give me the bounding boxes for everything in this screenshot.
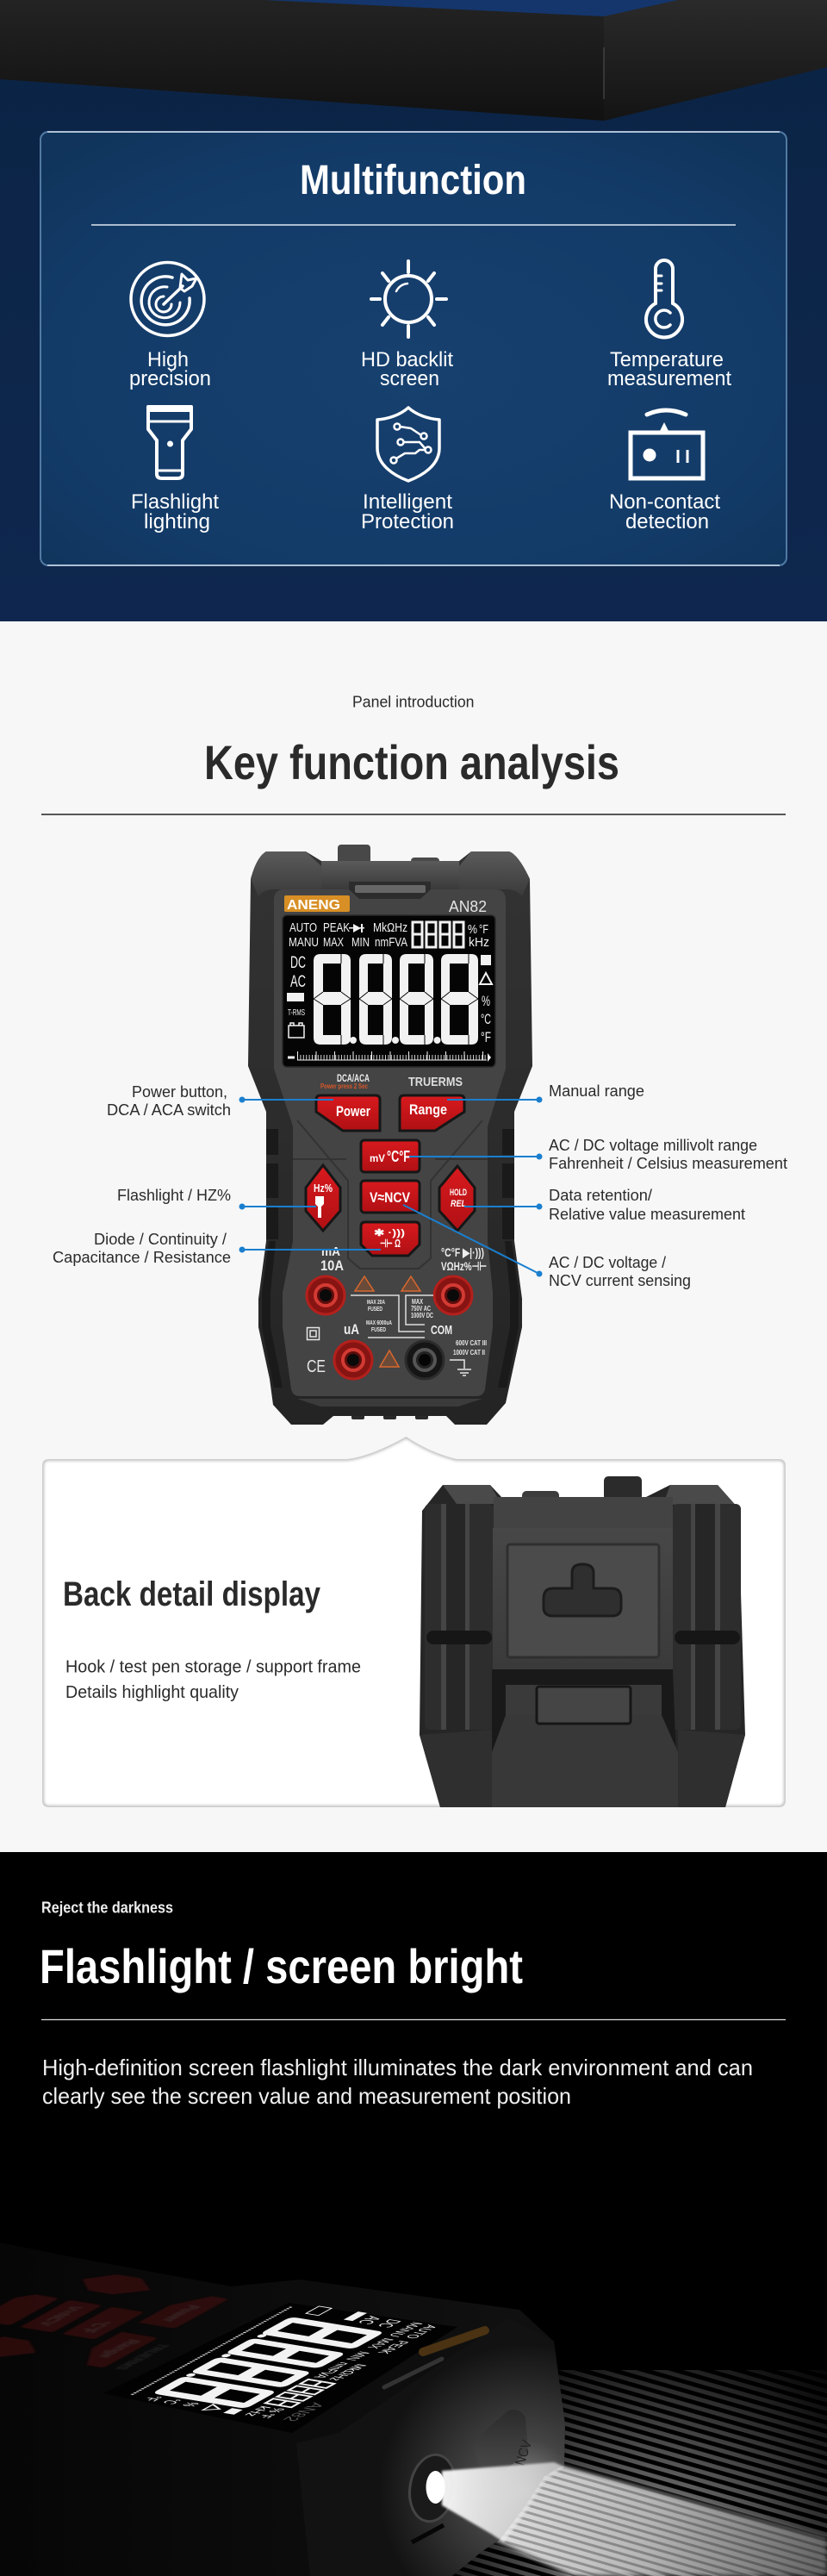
LCD indicators: MAX — [323, 935, 344, 950]
screen contents: PEAK — [374, 2340, 412, 2355]
jack: V — [434, 1276, 472, 1314]
ratings text: MAX 20A — [367, 1300, 385, 1306]
dim keypad — [0, 2267, 259, 2376]
section: flashlight and screen — [0, 1852, 827, 2576]
bar scale — [288, 1056, 487, 1060]
button: V NCV: V≈NCV — [370, 1189, 411, 1206]
lens bezel — [405, 2451, 460, 2525]
heading: Back detail display: Back detail display — [63, 1575, 321, 1613]
screen contents: MIN — [342, 2350, 372, 2361]
section: multifunction background — [0, 0, 827, 621]
icon: thermometer — [646, 260, 682, 337]
LCD indicators: % — [468, 922, 477, 937]
button: HOLD REL: HOLD — [450, 1188, 467, 1198]
icon: sun — [371, 261, 446, 337]
LCD screen: DC — [290, 954, 306, 972]
LCD indicators: nmFVA — [375, 935, 407, 950]
label: High precision — [129, 348, 211, 390]
paragraph — [42, 2055, 753, 2109]
LCD indicators: °F — [479, 922, 488, 937]
left column — [425, 1504, 494, 1730]
label: Temperature measurement: Temperature — [610, 348, 724, 371]
print above buttons: TRUERMS — [408, 1075, 463, 1089]
LCD screen: % — [482, 993, 490, 1009]
text: details — [65, 1658, 361, 1702]
compliance marks — [307, 1327, 471, 1375]
leader: diode — [239, 1246, 381, 1253]
ratings text: MAX 6000uA — [366, 1320, 392, 1326]
logo: ANENG — [284, 895, 350, 913]
dim keypad: °C°F — [77, 2320, 115, 2334]
screen contents: % — [264, 2407, 288, 2414]
screen contents — [127, 2302, 465, 2424]
leader: ncv — [403, 1205, 543, 1277]
button: Range: Range — [409, 1101, 447, 1118]
section: key function analysis — [0, 621, 827, 1852]
paragraph: clearly see the screen value and measurement position — [42, 2083, 571, 2109]
lower body — [492, 1669, 678, 1807]
LCD indicators: MkΩHz — [373, 920, 407, 935]
keypad frame lines — [293, 1120, 488, 1269]
label: Temperature measurement: measurement — [607, 367, 731, 390]
LCD screen — [283, 915, 495, 1067]
button: V NCV — [361, 1181, 420, 1213]
product: meter in the dark — [0, 2242, 565, 2576]
label: diode continuity — [53, 1231, 231, 1266]
label: voltage ncv — [549, 1254, 691, 1289]
button: HOLD REL: REL — [451, 1199, 466, 1209]
side lower shade — [420, 1730, 745, 1807]
screen contents: kHz — [241, 2405, 273, 2417]
label: voltage ncv: AC / DC voltage / — [549, 1254, 666, 1271]
right indicators — [481, 955, 491, 965]
label: millivolt and temperature: Fahrenheit / Celsius measurement — [549, 1155, 787, 1172]
LCD indicators: MIN — [351, 935, 370, 950]
product: multimeter front view — [248, 845, 532, 1425]
label: manual range: Manual range — [549, 1082, 644, 1100]
label: Flashlight lighting: lighting — [144, 510, 210, 533]
label: Flashlight lighting — [131, 490, 219, 533]
stand tab — [537, 1687, 631, 1724]
button: diode continuity: ✱ ·))) — [374, 1228, 405, 1238]
print above buttons — [320, 1072, 463, 1090]
jack labels: VΩHz%⊣⊢ — [441, 1259, 487, 1273]
button: Range — [400, 1095, 464, 1131]
knob and top details — [338, 845, 439, 866]
label: HD backlit screen: screen — [380, 367, 439, 390]
label: flashlight Hz: Flashlight / HZ% — [117, 1187, 231, 1204]
label: Intelligent Protection: Protection — [361, 510, 454, 533]
jack labels — [320, 1244, 487, 1338]
button: HOLD REL — [439, 1166, 475, 1231]
screen contents: AUTO — [401, 2324, 440, 2339]
label: power button: Power button, — [132, 1083, 227, 1101]
label: HD backlit screen: HD backlit — [361, 348, 453, 371]
label: millivolt and temperature — [549, 1137, 787, 1172]
label: High precision: precision — [129, 367, 211, 390]
paragraph: High-definition screen flashlight illuminates the dark environment and can — [42, 2055, 753, 2080]
shoulders — [251, 851, 530, 896]
feet — [351, 1413, 428, 1419]
warning triangles — [355, 1276, 420, 1367]
LCD indicators: AUTO — [289, 920, 317, 935]
screen contents: MkΩHz — [326, 2363, 370, 2381]
leader: range — [447, 1096, 543, 1103]
ratings text: MAX — [412, 1298, 423, 1306]
big digits — [314, 954, 351, 1045]
leader: millivolt — [409, 1153, 543, 1160]
button: Power: Power — [336, 1103, 370, 1120]
print above buttons: Power press 2 Sec — [320, 1082, 368, 1090]
icon: non-contact detector — [631, 410, 703, 478]
flashlight slot — [412, 2525, 444, 2542]
label: data retention: Relative value measurement — [549, 1206, 745, 1223]
LCD screen: T-RMS — [288, 1008, 305, 1018]
side grips — [262, 1129, 519, 1388]
dim keypad: Power — [158, 2304, 205, 2323]
label: diode continuity: Diode / Continuity / — [94, 1231, 227, 1248]
jack labels: 10A — [320, 1257, 344, 1274]
screen contents: °C — [159, 2398, 185, 2405]
product: meter back view — [420, 1476, 745, 1807]
small heading: Panel introduction: Panel introduction — [352, 693, 474, 710]
label: Non-contact detection — [609, 490, 720, 533]
button: mV temperature: °C°F — [387, 1148, 410, 1165]
ratings text: 600V CAT III — [456, 1339, 487, 1347]
LCD screen: AC — [290, 973, 306, 991]
jack: 10A — [307, 1276, 345, 1314]
faint floor stripes — [431, 2370, 827, 2576]
product box top edge — [0, 0, 827, 121]
light cone — [426, 2462, 564, 2542]
leader: power — [239, 1096, 333, 1103]
icon: shield with circuit — [377, 408, 439, 481]
label: Intelligent Protection: Intelligent — [363, 490, 452, 514]
screen contents: AN82 — [279, 2402, 329, 2423]
button: Power — [316, 1095, 380, 1131]
text: details: Details highlight quality — [65, 1683, 239, 1702]
LCD screen: °C — [481, 1011, 491, 1027]
lens glow — [426, 2471, 445, 2504]
dim keypad: TRUERMS — [111, 2343, 172, 2371]
screen contents: °F — [255, 2412, 278, 2419]
LCD screen: °F — [481, 1029, 491, 1045]
label: Flashlight lighting: Flashlight — [131, 490, 219, 514]
label: Non-contact detection: detection — [625, 510, 709, 533]
screen contents: nmFVA — [309, 2361, 352, 2380]
meter body — [248, 851, 532, 1425]
heading: Flashlight / screen bright: Flashlight / screen bright — [40, 1939, 523, 1993]
screen contents: MAX — [364, 2337, 396, 2349]
label: power button — [107, 1083, 231, 1119]
text: details: Hook / test pen storage / support frame — [65, 1658, 361, 1677]
label: High precision: High — [147, 348, 189, 371]
bottom rim — [297, 1399, 482, 1407]
ratings text: 1000V CAT II — [453, 1349, 485, 1357]
leader: flashlight — [239, 1203, 316, 1210]
dim keypad: Range — [95, 2338, 145, 2359]
leader: hold — [464, 1203, 543, 1210]
label: millivolt and temperature: AC / DC voltage millivolt range — [549, 1137, 757, 1154]
CE mark: CE — [307, 1357, 326, 1376]
LCD indicators: kHz — [469, 935, 489, 950]
button: mV temperature — [361, 1140, 420, 1172]
label: HD backlit screen — [361, 348, 453, 390]
screen contents: AC — [353, 2315, 385, 2325]
model: AN82: AN82 — [449, 898, 487, 915]
handle notch — [349, 882, 431, 899]
screen contents: % — [178, 2401, 203, 2408]
ratings text: FUSED — [368, 1307, 382, 1313]
print above buttons: DCA/ACA — [337, 1072, 370, 1084]
logo: ANENG: ANENG — [287, 898, 340, 913]
dim keypad: V≈NCV — [34, 2305, 87, 2327]
ratings text: FUSED — [371, 1327, 386, 1333]
label: data retention: Data retention/ — [549, 1187, 652, 1204]
button: diode continuity: ⊣⊢ Ω — [380, 1237, 401, 1250]
panel: back detail card — [42, 1437, 786, 1807]
label: Temperature measurement — [607, 348, 731, 390]
small heading: Reject the darkness: Reject the darkness — [41, 1899, 173, 1917]
screen contents: DC — [372, 2318, 404, 2329]
ratings text: 750V AC — [411, 1305, 431, 1313]
button: Hz flashlight: Hz% — [314, 1182, 333, 1194]
label: Non-contact detection: Non-contact — [609, 490, 720, 514]
jack labels: °C°F ▶|·))) — [441, 1245, 484, 1259]
jack labels: COM — [431, 1323, 452, 1338]
handle slot and logo strip — [384, 2330, 485, 2387]
keyhole — [544, 1564, 621, 1616]
faceplate — [274, 889, 506, 1396]
heading: Key function analysis: Key function analysis — [204, 735, 619, 789]
button: diode continuity — [361, 1222, 420, 1256]
screen face — [103, 2303, 457, 2433]
jack: COM — [406, 1341, 444, 1379]
screen contents: °F — [140, 2394, 166, 2402]
label: diode continuity: Capacitance / Resistance — [53, 1249, 231, 1266]
hook plate — [493, 1528, 673, 1669]
right column — [673, 1504, 741, 1730]
NCV sensor head — [475, 2410, 535, 2471]
jack: uA — [334, 1341, 372, 1379]
LCD indicators — [289, 920, 489, 950]
icon: target — [131, 262, 204, 336]
small digits — [413, 922, 463, 947]
callouts: key function leaders — [53, 1082, 787, 1289]
jack labels: mA — [321, 1244, 340, 1259]
digit seams — [314, 954, 478, 1045]
heading: Multifunction: Multifunction — [300, 158, 526, 203]
NCV sensor head: NCV — [513, 2438, 535, 2467]
label: Intelligent Protection — [361, 490, 454, 533]
label: data retention — [549, 1187, 745, 1223]
circuit lines — [351, 1295, 433, 1338]
label: power button: DCA / ACA switch — [107, 1101, 231, 1119]
screen contents: MANU — [385, 2321, 426, 2337]
end face — [296, 2318, 565, 2576]
ratings text: 1000V DC — [411, 1312, 433, 1319]
ratings text — [366, 1298, 487, 1357]
label: voltage ncv: NCV current sensing — [549, 1272, 691, 1289]
icon: flashlight — [148, 407, 191, 478]
jack labels: uA — [344, 1321, 359, 1338]
button: Hz flashlight — [306, 1165, 340, 1231]
LCD indicators: PEAK — [323, 920, 350, 935]
panel: multifunction — [40, 132, 787, 565]
light beam on floor — [491, 2463, 827, 2576]
button: mV temperature: mV — [370, 1152, 385, 1164]
LCD indicators: MANU — [289, 935, 319, 950]
shoulders — [443, 1485, 738, 1508]
